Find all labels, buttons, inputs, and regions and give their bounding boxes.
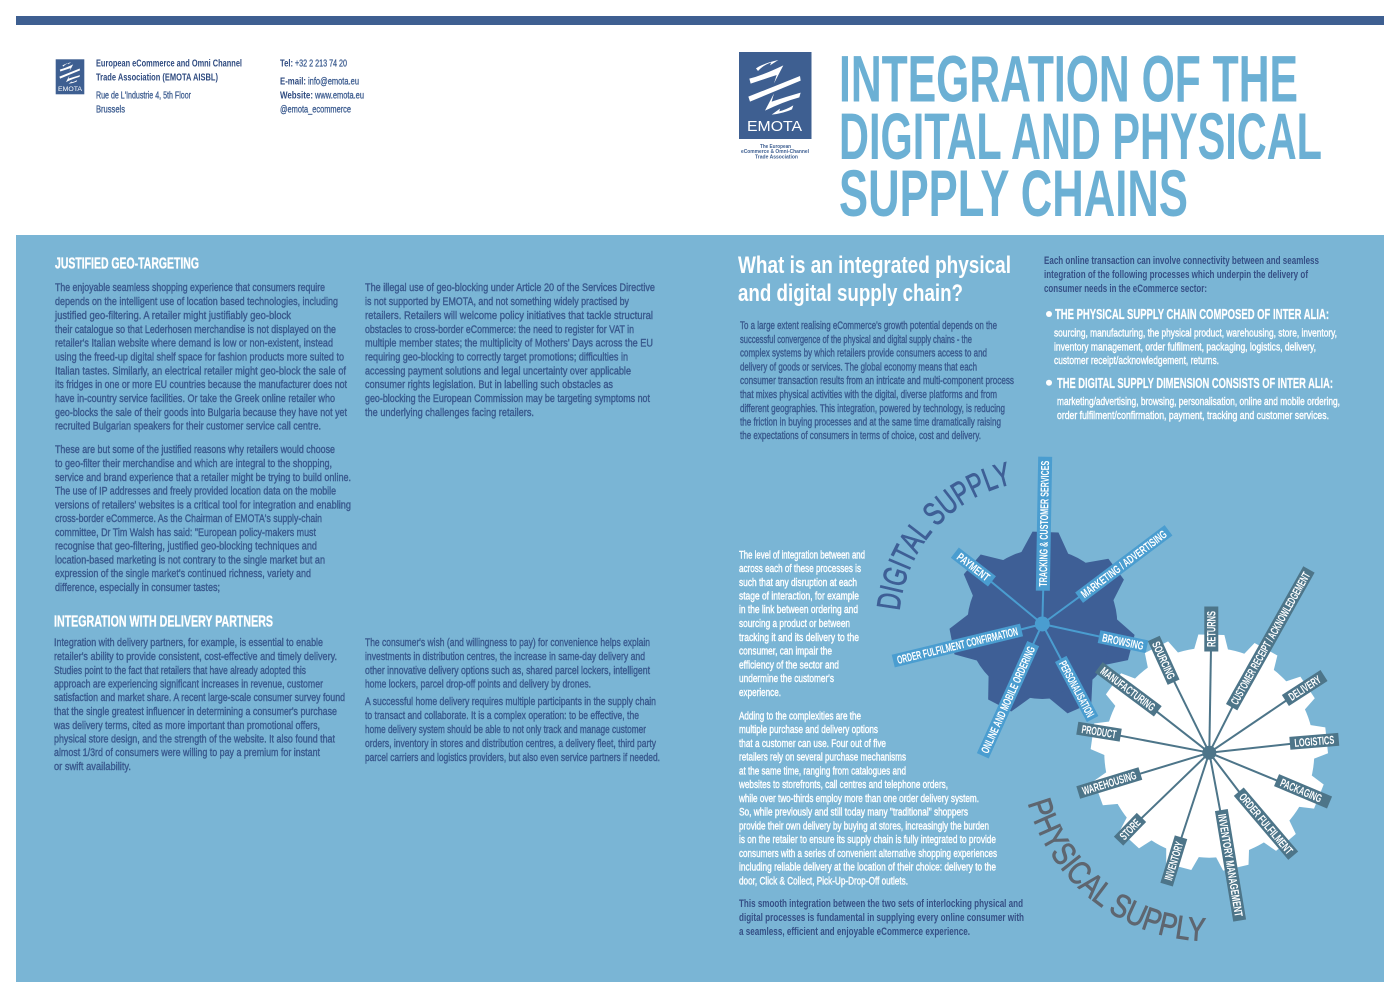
text block: complexities: Adding to the complexities are the — [739, 710, 861, 722]
text block: geo-targeting column 1: Italian tastes. Similarly, an electrical retailer might geo-block the sale of — [55, 366, 347, 378]
text block: smooth integration conclusion: This smooth integration between the two sets of interlocking physical and — [739, 898, 1023, 910]
text block: smooth integration conclusion: a seamless, efficient and enjoyable eCommerce experience. — [739, 926, 970, 938]
text block: integrated intro: that mixes physical activities with the digital, diverse platforms and from — [740, 389, 997, 401]
text block: level of integration: such that any disruption at each — [739, 577, 857, 589]
text block: smooth integration conclusion — [739, 898, 1024, 938]
small EMOTA logo — [56, 59, 84, 94]
text block: each online transaction — [1044, 255, 1319, 295]
text block: delivery partners column 2: A successful home delivery requires multiple participants in the supply chain — [365, 696, 656, 708]
label: inventory — [1160, 835, 1188, 887]
text block: complexities: multiple purchase and delivery options — [739, 724, 878, 736]
heading: what is an integrated supply chain — [738, 252, 1011, 307]
contact details: +32 2 213 74 20 — [295, 58, 347, 70]
organisation address — [96, 58, 242, 116]
bullet: physical supply chain — [1046, 306, 1337, 367]
contact details: Website: — [280, 90, 313, 102]
heading: what is an integrated supply chain: and digital supply chain? — [738, 280, 963, 307]
text block: geo-targeting column 2: the underlying challenges facing retailers. — [365, 407, 534, 419]
text block: geo-targeting column 1 — [54, 282, 351, 594]
label: order fulfilment — [1233, 788, 1298, 860]
contact details — [280, 58, 364, 116]
text block: geo-targeting column 2: obstacles to cross-border eCommerce: the need to register for VAT in — [365, 324, 634, 336]
small EMOTA logo: EMOTA — [58, 86, 83, 93]
text block: geo-targeting column 1: expression of the single market's continued richness, variety and — [55, 568, 311, 580]
text block: complexities: So, while previously and still today many "traditional" shoppers — [739, 807, 968, 819]
label: order fulfilment confirmation — [892, 624, 1023, 668]
text block: integrated intro: consumer transaction results from an intricate and multi-component process — [740, 375, 1014, 387]
label: packaging: PACKAGING — [1278, 777, 1323, 806]
text block: delivery partners column 2: orders, inventory in stores and distribution centres, a delivery fleet, third party — [365, 738, 656, 750]
large EMOTA logo — [739, 52, 812, 160]
text block: level of integration: efficiency of the sector and — [739, 660, 839, 672]
label: logistics: LOGISTICS — [1294, 735, 1335, 750]
label: customer receipt / acknowledgement — [1226, 566, 1315, 711]
arc heading: physical supply: PHYSICAL SUPPLY — [1028, 798, 1206, 941]
label: tracking & customer services — [1036, 457, 1052, 591]
text block: geo-targeting column 1: recognise that geo-filtering, justified geo-blocking techniques and — [55, 540, 317, 552]
heading: what is an integrated supply chain: What is an integrated physical — [738, 252, 1011, 279]
title: SUPPLY CHAINS — [839, 156, 1188, 230]
text block: geo-targeting column 2: is not supported by EMOTA, and not something widely practised by — [365, 296, 629, 308]
large EMOTA logo: eCommerce & Omni-Channel — [741, 149, 810, 155]
text block: level of integration: experience. — [739, 687, 781, 699]
text block: geo-targeting column 1: using the freed-up digital shelf space for fashion products more suited to — [55, 352, 344, 364]
text block: geo-targeting column 1: geo-blocks the sale of their goods into Bulgaria because they have not yet — [55, 407, 348, 419]
label: packaging — [1274, 774, 1332, 809]
text block: delivery partners column 1: Integration with delivery partners, for example, is essential to enable — [54, 637, 323, 649]
bullet: physical supply chain: customer receipt/acknowledgement, returns. — [1054, 355, 1219, 367]
text block: delivery partners column 1: satisfaction and market share. A recent large-scale consumer survey found — [54, 692, 345, 704]
text block: geo-targeting column 2: accessing payment solutions and legal uncertainty over applicable — [365, 366, 631, 378]
text block: delivery partners column 1: was delivery terms, cited as more important than promotional offers, — [53, 720, 320, 732]
bullet: physical supply chain: inventory management, order fulfilment, packaging, logistics, delivery, — [1054, 341, 1316, 353]
contact details: info@emota.eu — [308, 76, 359, 88]
contact details: Tel: — [280, 58, 293, 70]
text block: geo-targeting column 1: difference, especially in consumer tastes; — [55, 582, 220, 594]
text block: complexities: while over two-thirds employ more than one order delivery system. — [738, 793, 979, 805]
text block: delivery partners column 2: other innovative delivery options such as, shared parcel lockers, intelligent — [365, 665, 651, 677]
label: store — [1114, 813, 1146, 846]
text block: complexities: at the same time, ranging from catalogues and — [739, 765, 906, 777]
label: payment: PAYMENT — [954, 551, 991, 584]
text block: complexities — [738, 710, 997, 888]
text block: level of integration: in the link between ordering and — [739, 604, 858, 616]
text block: geo-targeting column 1: location-based marketing is not contrary to the single market but an — [55, 554, 325, 566]
text block: complexities: retailers rely on several purchase mechanisms — [739, 752, 906, 764]
text block: complexities: door, Click & Collect, Pick-Up-Drop-Off outlets. — [739, 876, 908, 888]
label: returns — [1204, 606, 1218, 652]
text block: delivery partners column 2: home lockers, parcel drop-off points and delivery by drones. — [365, 678, 591, 690]
text block: integrated intro: delivery of goods or services. The global economy means that each — [740, 362, 977, 374]
label: online and mobile ordering: ONLINE AND MOBILE ORDERING — [980, 645, 1038, 755]
label: online and mobile ordering — [977, 641, 1040, 759]
text block: delivery partners column 2: to transact and collaborate. It is a complex operation: to be effective, the — [365, 710, 639, 722]
label: logistics — [1289, 733, 1339, 750]
text block: integrated intro: the expectations of consumers in terms of choice, cost and delivery. — [740, 430, 981, 442]
text block: delivery partners column 1: almost 1/3rd of consumers were willing to pay a premium for instant — [54, 747, 321, 759]
large EMOTA logo: EMOTA — [747, 118, 802, 135]
panel: blue content background — [16, 235, 1384, 982]
label: manufacturing — [1095, 662, 1162, 717]
label: order fulfilment: ORDER FULFILMENT — [1236, 792, 1294, 857]
text block: integrated intro: the friction in buying processes and at the same time dramatically raising — [740, 416, 1001, 428]
gear: physical supply — [1090, 629, 1328, 871]
organisation address: Brussels — [96, 104, 125, 116]
text block: delivery partners column 1: physical store design, and the strength of the website. It also found that — [54, 734, 336, 746]
heading: integration with delivery partners: INTEGRATION WITH DELIVERY PARTNERS — [54, 614, 273, 630]
label: product — [1076, 722, 1122, 742]
text block: geo-targeting column 1: depends on the intelligent use of location based technologies, including — [55, 296, 338, 308]
text block: delivery partners column 2: The consumer's wish (and willingness to pay) for convenience helps explain — [365, 637, 650, 649]
label: inventory management — [1214, 809, 1246, 922]
text block: integrated intro: To a large extent realising eCommerce's growth potential depends on the — [740, 320, 997, 332]
label: store: STORE — [1118, 817, 1144, 843]
text block: geo-targeting column 1: committee, Dr Tim Walsh has said: "European policy-makers must — [55, 527, 317, 539]
label: sourcing: SOURCING — [1149, 640, 1177, 681]
label: browsing — [1098, 630, 1148, 654]
text block: delivery partners column 2: home delivery system should be able to not only track and manage customer — [365, 724, 646, 736]
text block: integrated intro: complex systems by which retailers provide consumers access to and — [740, 348, 987, 360]
text block: geo-targeting column 1: service and brand experience that a retailer might be trying to build online. — [55, 472, 351, 484]
label: product: PRODUCT — [1081, 724, 1117, 741]
text block: level of integration: consumer, can impair the — [739, 646, 832, 658]
text block: geo-targeting column 1: The use of IP addresses and freely provided location data on the mobile — [55, 486, 336, 498]
text block: level of integration: sourcing a product or between — [739, 618, 850, 630]
gear: digital supply — [947, 531, 1137, 718]
text block: geo-targeting column 1: justified geo-filtering. A retailer might justifiably geo-block — [54, 310, 291, 322]
text block: delivery partners column 1 — [53, 637, 345, 773]
text block: complexities: websites to storefronts, call centres and telephone orders, — [738, 779, 948, 791]
label: customer receipt / acknowledgement: CUSTOMER RECEIPT / ACKNOWLEDGEMENT — [1229, 570, 1313, 707]
text block: geo-targeting column 2 — [365, 282, 655, 419]
label: personalisation — [1055, 656, 1098, 722]
text block: geo-targeting column 2: multiple member states; the multiplicity of Mothers' Days across the EU — [365, 338, 653, 350]
large EMOTA logo: Trade Association — [755, 154, 798, 160]
contact details: E-mail: — [280, 76, 306, 88]
text block: geo-targeting column 1: cross-border eCommerce. As the Chairman of EMOTA's supply-chain — [55, 513, 322, 525]
text block: level of integration: tracking it and its delivery to the — [739, 632, 859, 644]
label: sourcing — [1147, 636, 1180, 685]
text block: delivery partners column 2: investments in distribution centres, the increase in same-day delivery and — [365, 651, 645, 663]
text block: delivery partners column 1: that the single greatest influencer in determining a consumer's purchase — [54, 706, 337, 718]
label: warehousing: WAREHOUSING — [1081, 770, 1138, 798]
text block: delivery partners column 1: Studies point to the fact that retailers that have already adopted this — [54, 665, 306, 677]
organisation address: Trade Association (EMOTA AISBL) — [96, 72, 218, 84]
label: inventory management: INVENTORY MANAGEMENT — [1215, 813, 1244, 918]
text block: geo-targeting column 1: These are but some of the justified reasons why retailers would choose — [55, 444, 335, 456]
text block: geo-targeting column 2: requiring geo-blocking to correctly target promotions; difficulties in — [365, 352, 628, 364]
text block: level of integration: The level of integration between and — [739, 550, 865, 562]
contact details: @emota_ecommerce — [280, 104, 351, 116]
top bar — [16, 16, 1384, 25]
text block: geo-targeting column 1: recruited Bulgarian speakers for their customer service call centre. — [55, 420, 321, 432]
text block: level of integration: stage of interaction, for example — [739, 591, 859, 603]
text block: complexities: consumers with a series of convenient alternative shopping experiences — [739, 848, 997, 860]
text block: complexities: is on the retailer to ensure its supply chain is fully integrated to provide — [739, 834, 996, 846]
organisation address: European eCommerce and Omni Channel — [96, 58, 242, 70]
label: browsing: BROWSING — [1101, 632, 1145, 653]
title — [839, 42, 1322, 230]
text block: delivery partners column 1: approach are experiencing significant increases in revenue, customer — [54, 678, 323, 690]
text block: geo-targeting column 1: its fridges in one or more EU countries because the manufacturer does not — [55, 379, 348, 391]
text block: geo-targeting column 1: versions of retailers' websites is a critical tool for integration and enabling — [55, 500, 351, 512]
label: inventory: INVENTORY — [1163, 840, 1186, 882]
text block: integrated intro: successful convergence of the physical and digital supply chains - the — [740, 334, 972, 346]
text block: delivery partners column 2 — [365, 637, 660, 764]
label: order fulfilment confirmation: ORDER FULFILMENT CONFIRMATION — [896, 626, 1019, 667]
label: delivery: DELIVERY — [1287, 674, 1324, 704]
text block: geo-targeting column 2: consumer rights legislation. But in labelling such obstacles as — [365, 379, 613, 391]
label: marketing / advertising — [1075, 525, 1173, 603]
text block: integrated intro: different geographies. This integration, powered by technology, is reducing — [740, 403, 1005, 415]
label: warehousing — [1076, 767, 1142, 799]
text block: complexities: including reliable delivery at the location of their choice: delivery to the — [739, 862, 996, 874]
text block: complexities: provide their own delivery by buying at stores, increasingly the burden — [739, 820, 989, 832]
arc heading: digital supply: DIGITAL SUPPLY — [876, 462, 1007, 610]
text block: delivery partners column 1: retailer's ability to provide consistent, cost-effective and timely delivery. — [54, 651, 337, 663]
text block: geo-targeting column 1: have in-country service facilities. Or take the Greek online retailer who — [55, 393, 335, 405]
label: delivery — [1282, 670, 1328, 706]
text block: integrated intro — [740, 320, 1014, 442]
text block: delivery partners column 2: parcel carriers and logistics providers, but also even service partners if needed. — [365, 752, 660, 764]
label: manufacturing: MANUFACTURING — [1098, 666, 1157, 714]
text block: geo-targeting column 1: retailer's Italian website where demand is low or non-existent, instead — [55, 338, 333, 350]
contact details: www.emota.eu — [314, 90, 364, 102]
text block: level of integration: across each of these processes is — [739, 563, 861, 575]
text block: delivery partners column 1: or swift availability. — [54, 761, 131, 773]
label: personalisation: PERSONALISATION — [1056, 659, 1096, 720]
text block: level of integration — [739, 550, 865, 699]
label: payment — [951, 547, 996, 587]
heading: justified geo-targeting: JUSTIFIED GEO-TARGETING — [55, 256, 199, 272]
large EMOTA logo: The European — [760, 144, 791, 150]
text block: geo-targeting column 2: retailers. Retailers will welcome policy initiatives that tackle structural — [365, 310, 653, 322]
text block: smooth integration conclusion: digital processes is fundamental in supplying every online consumer with — [739, 912, 1024, 924]
text block: geo-targeting column 1: The enjoyable seamless shopping experience that consumers require — [55, 282, 325, 294]
bullet: digital supply dimension — [1046, 375, 1340, 422]
text block: geo-targeting column 2: geo-blocking the European Commission may be targeting symptoms not — [365, 393, 651, 405]
text block: complexities: that a customer can use. Four out of five — [739, 738, 886, 750]
text block: each online transaction: consumer needs in the eCommerce sector: — [1044, 283, 1207, 295]
label: marketing / advertising: MARKETING / ADVERTISING — [1079, 529, 1170, 601]
label: returns: RETURNS — [1206, 611, 1218, 647]
text block: level of integration: undermine the customer's — [739, 673, 834, 685]
label: tracking & customer services: TRACKING & CUSTOMER SERVICES — [1038, 460, 1052, 587]
text block: geo-targeting column 2: The illegal use of geo-blocking under Article 20 of the Services Directive — [365, 282, 655, 294]
organisation address: Rue de L'Industrie 4, 5th Floor — [96, 90, 191, 102]
text block: geo-targeting column 1: their catalogue so that Lederhosen merchandise is not displayed on the — [55, 324, 336, 336]
text block: geo-targeting column 1: to geo-filter their merchandise and which are integral to the shopping, — [55, 458, 332, 470]
